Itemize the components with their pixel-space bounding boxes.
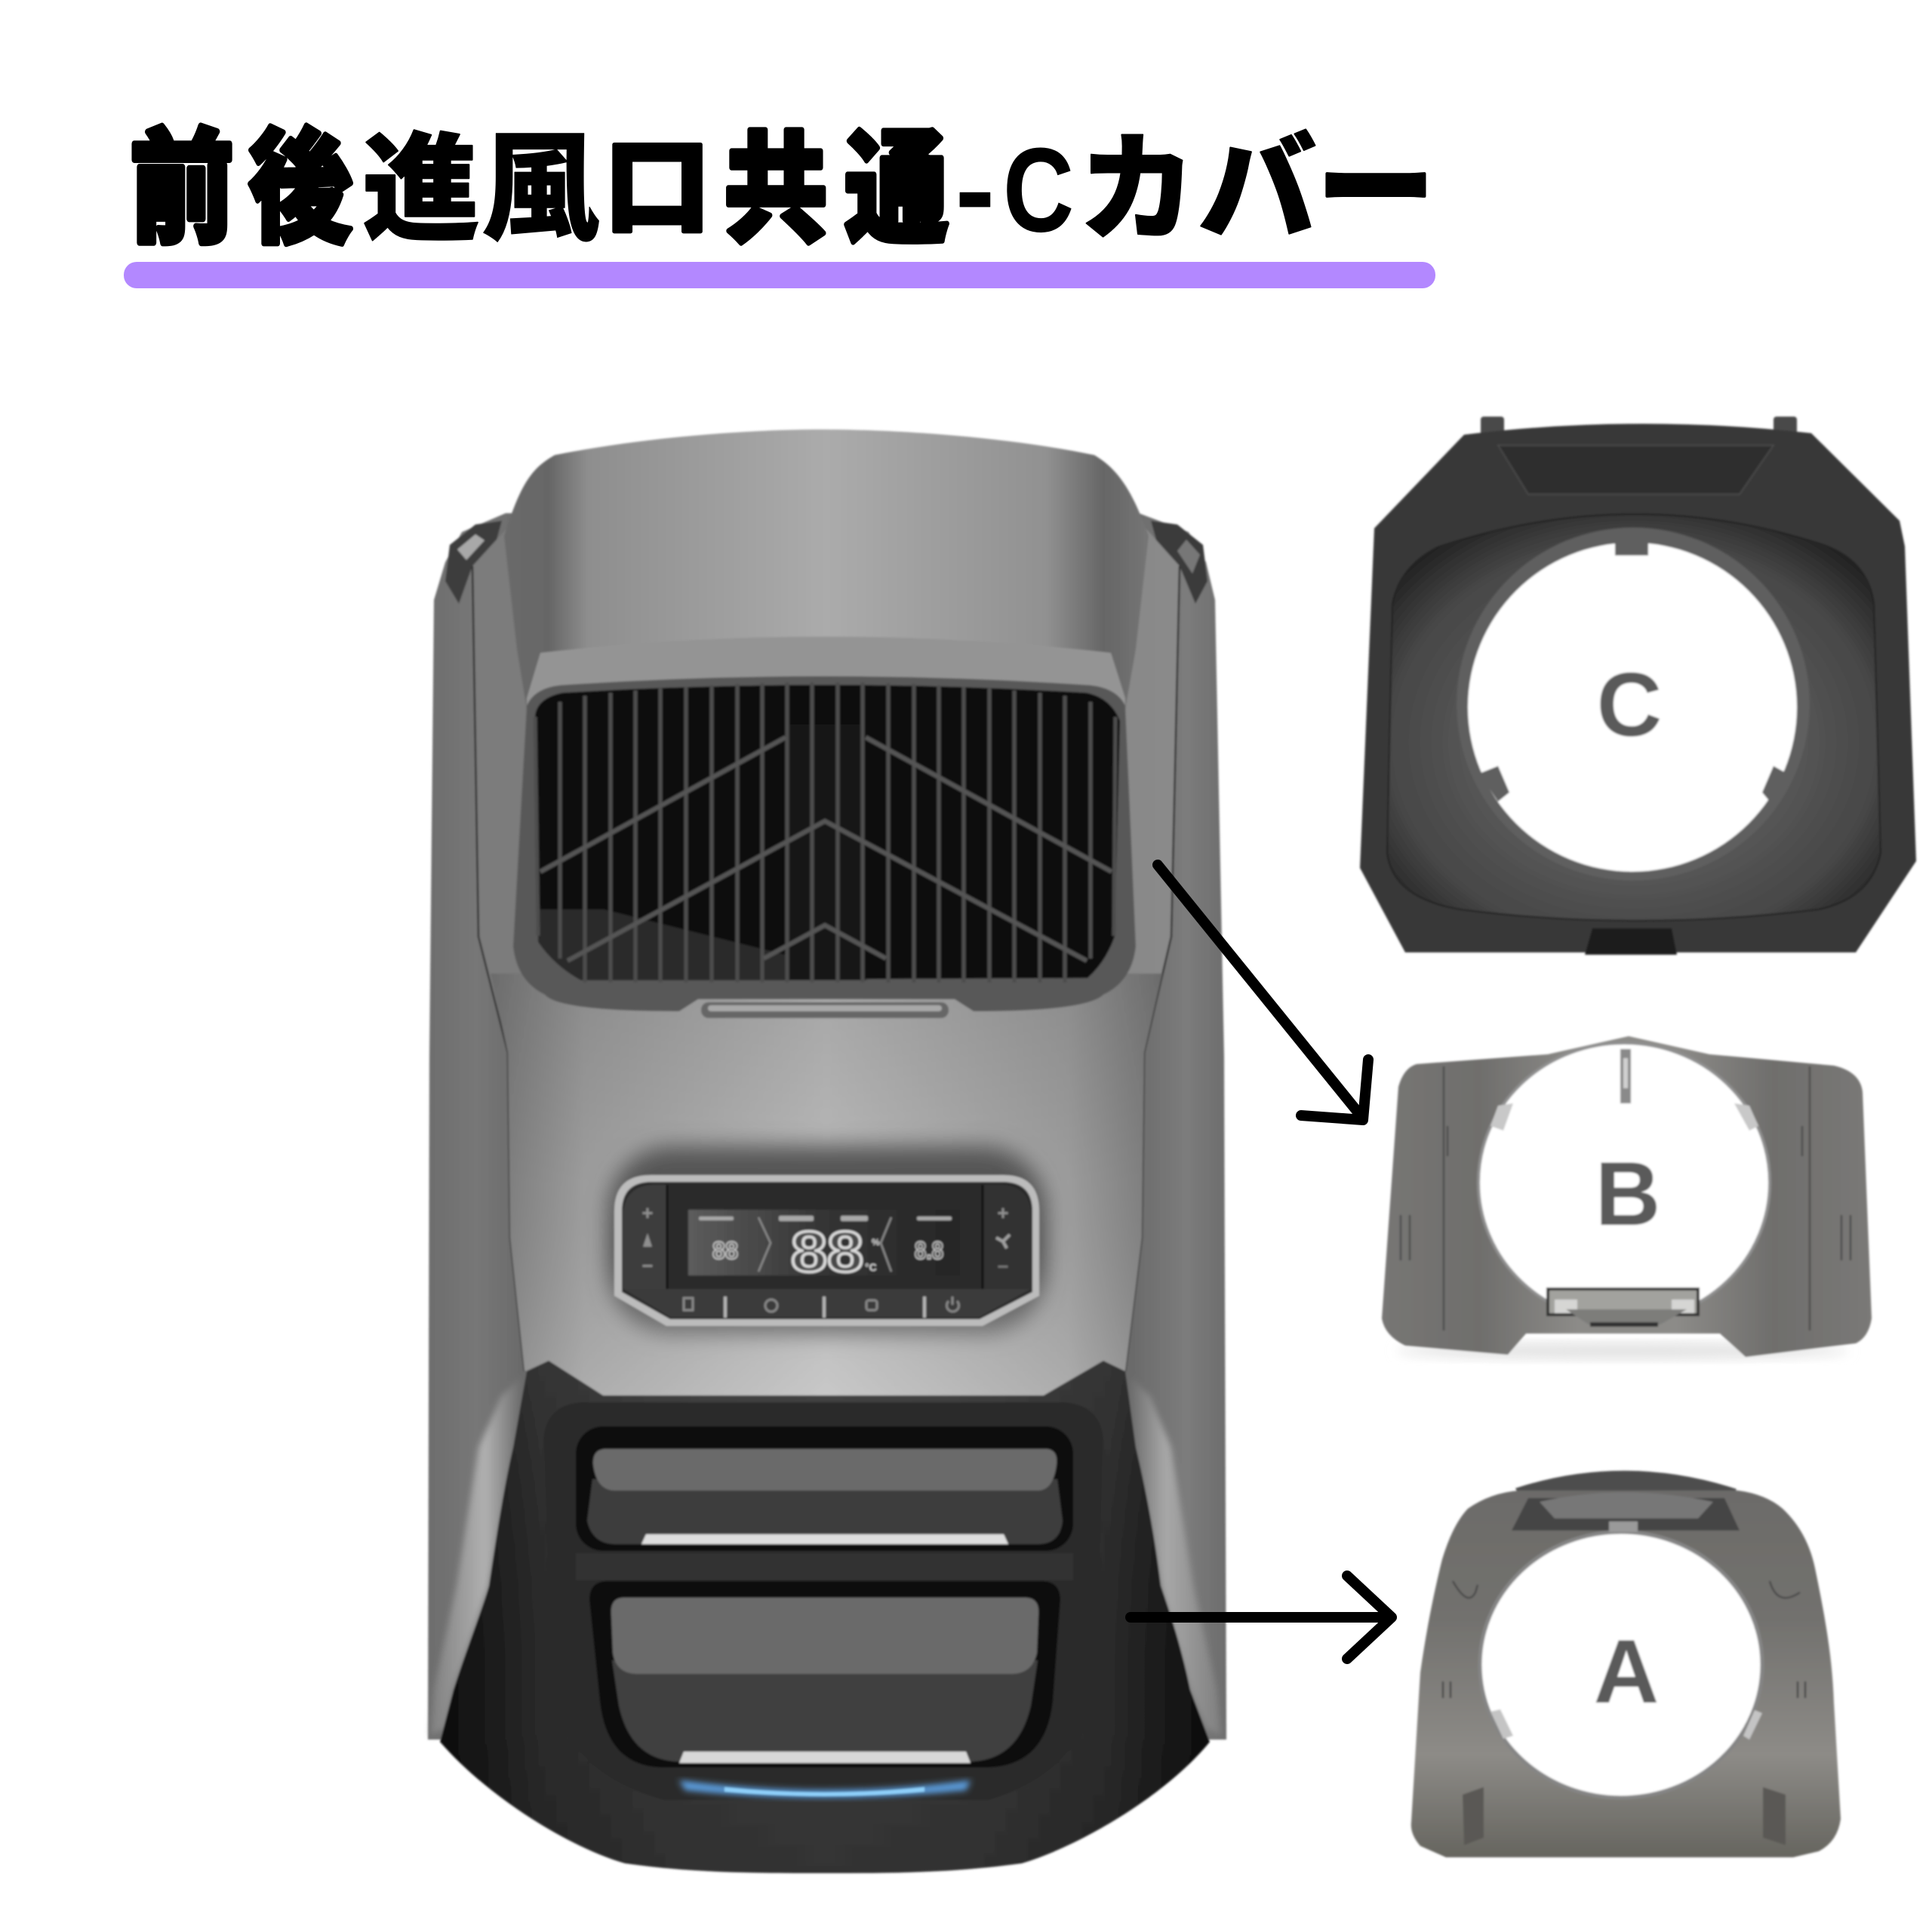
right touch keys [996, 1201, 1010, 1278]
key dividers [667, 1185, 983, 1289]
grille vertical bars [535, 682, 1115, 983]
grille opening [535, 685, 1120, 980]
blue status light [679, 1780, 971, 1798]
top cover [504, 429, 1149, 709]
vent crossbar [576, 1553, 1073, 1580]
button strip [623, 1289, 1031, 1317]
right light strip [1129, 1375, 1221, 1736]
panel face [622, 1182, 1032, 1319]
upper flap [587, 1449, 1063, 1544]
lower flap [611, 1598, 1038, 1763]
A inner top [1512, 1498, 1740, 1531]
C bottom tab [1585, 928, 1677, 955]
B ring tabs [1491, 1103, 1758, 1131]
cover C [1360, 417, 1916, 955]
left light strip [430, 1375, 522, 1736]
title: 風 [481, 125, 599, 256]
unit marks: % [872, 1237, 880, 1247]
key side areas [623, 1185, 1031, 1289]
right touch keys: − [997, 1255, 1009, 1278]
left readout: 88 [712, 1237, 738, 1264]
upper vent recess [576, 1426, 1073, 1551]
grille central shade [789, 724, 864, 980]
title: カ [1078, 125, 1196, 256]
title: 前 [130, 121, 234, 259]
panel frame [614, 1175, 1039, 1326]
lower black housing [440, 1361, 1210, 1873]
main readout: 88 [791, 1220, 863, 1284]
left touch keys: + [641, 1201, 654, 1224]
title: バ [1198, 125, 1316, 256]
title: - [955, 125, 995, 256]
celsius mark: °C [865, 1261, 877, 1273]
LCD chevrons [758, 1217, 891, 1272]
lower metal panel [491, 974, 1162, 1395]
C top inset [1498, 445, 1774, 494]
lower vent recess [589, 1581, 1060, 1767]
left touch keys: − [641, 1254, 654, 1277]
title: 進 [362, 125, 480, 256]
title [130, 121, 1435, 259]
A top tab [1609, 1521, 1638, 1532]
left touch keys [641, 1201, 654, 1277]
A seams [1443, 1581, 1805, 1698]
status icons [699, 1216, 952, 1221]
B top clip [1620, 1049, 1631, 1103]
title: C [1003, 124, 1074, 257]
vent bezel [543, 1402, 1103, 1800]
C hole [1468, 543, 1797, 872]
label C: C [1597, 654, 1662, 755]
product: air conditioner unit [428, 429, 1226, 1873]
A top arc [1515, 1471, 1737, 1506]
title: 後 [248, 121, 352, 259]
B hole [1478, 1043, 1770, 1322]
cover band [527, 637, 1125, 709]
C ring tabs [1479, 536, 1787, 801]
title: 通 [844, 121, 949, 258]
side shell [428, 513, 1226, 1740]
label B: B [1595, 1143, 1660, 1244]
button icons [684, 1297, 958, 1312]
B seams [1401, 1066, 1850, 1331]
label A: A [1594, 1621, 1659, 1722]
cover B [1382, 1036, 1872, 1360]
A ring tabs [1491, 1709, 1762, 1740]
right touch keys: + [997, 1201, 1009, 1224]
LCD screen [688, 1210, 960, 1275]
arrow to cover B [1158, 865, 1368, 1120]
handle [701, 1002, 949, 1018]
clips [1481, 417, 1797, 439]
arrow to cover A [1131, 1576, 1392, 1659]
C bowl [1387, 514, 1881, 921]
grille haze [538, 909, 868, 980]
grille bezel [513, 676, 1136, 1011]
button separators [725, 1297, 924, 1318]
cover A [1411, 1471, 1841, 1857]
control panel [614, 1175, 1039, 1326]
B shell [1382, 1036, 1872, 1357]
B bottom box [1548, 1289, 1698, 1327]
A hole [1480, 1532, 1762, 1798]
C outer shell [1360, 423, 1916, 952]
grille chevrons [540, 737, 1112, 961]
side seam lines [472, 566, 1180, 1371]
title: ー [1317, 125, 1435, 256]
control panel recess [608, 1146, 1046, 1334]
B shadow [1396, 1342, 1849, 1360]
mid side strips [472, 513, 1180, 1371]
A inner top light [1540, 1493, 1713, 1518]
title: 口 [605, 130, 710, 246]
right readout: 8.8 [915, 1237, 943, 1264]
shoulder brackets [445, 521, 1208, 604]
title: 共 [724, 124, 828, 257]
C ring [1457, 528, 1810, 881]
A foot marks [1463, 1787, 1786, 1845]
title underline [124, 262, 1435, 288]
A shell [1411, 1491, 1841, 1857]
